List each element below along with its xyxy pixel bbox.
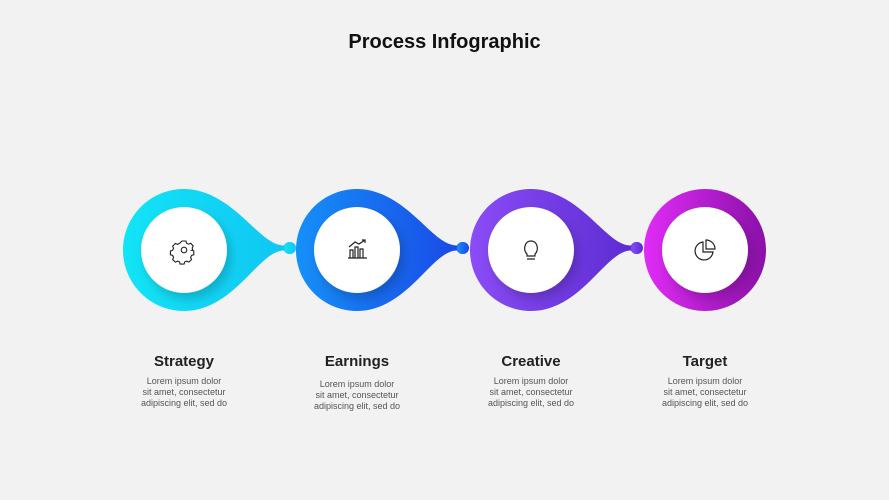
- title: Process Infographic: [348, 31, 541, 53]
- text: strategy: Lorem ipsum dolor: [147, 376, 221, 386]
- icon: gear: [170, 241, 194, 264]
- icon: pie: [695, 240, 715, 260]
- text: strategy: adipiscing elit, sed do: [141, 398, 227, 408]
- text: creative: Lorem ipsum dolor: [494, 376, 568, 386]
- text: earnings: adipiscing elit, sed do: [314, 401, 400, 411]
- text: earnings: Earnings: [325, 353, 389, 370]
- text: target: [662, 353, 748, 408]
- text: target: Target: [683, 353, 727, 370]
- step 2 shape: [296, 189, 469, 311]
- text: creative: adipiscing elit, sed do: [488, 398, 574, 408]
- text: earnings: sit amet, consectetur: [315, 390, 399, 400]
- text: creative: Creative: [501, 353, 561, 370]
- text: strategy: sit amet, consectetur: [142, 387, 226, 397]
- icon: chart: [348, 240, 367, 258]
- step 3 shape: [470, 189, 643, 311]
- text: target: sit amet, consectetur: [663, 387, 747, 397]
- text: earnings: Lorem ipsum dolor: [320, 379, 394, 389]
- step 1 shape: [123, 189, 296, 311]
- text: target: adipiscing elit, sed do: [662, 398, 748, 408]
- text: creative: [488, 353, 574, 408]
- text: strategy: [141, 353, 227, 408]
- icon: bulb: [525, 241, 537, 259]
- text: creative: sit amet, consectetur: [489, 387, 573, 397]
- step 4 shape: [644, 189, 766, 311]
- text: strategy: Strategy: [154, 353, 214, 370]
- text: earnings: [314, 353, 400, 411]
- text: target: Lorem ipsum dolor: [668, 376, 742, 386]
